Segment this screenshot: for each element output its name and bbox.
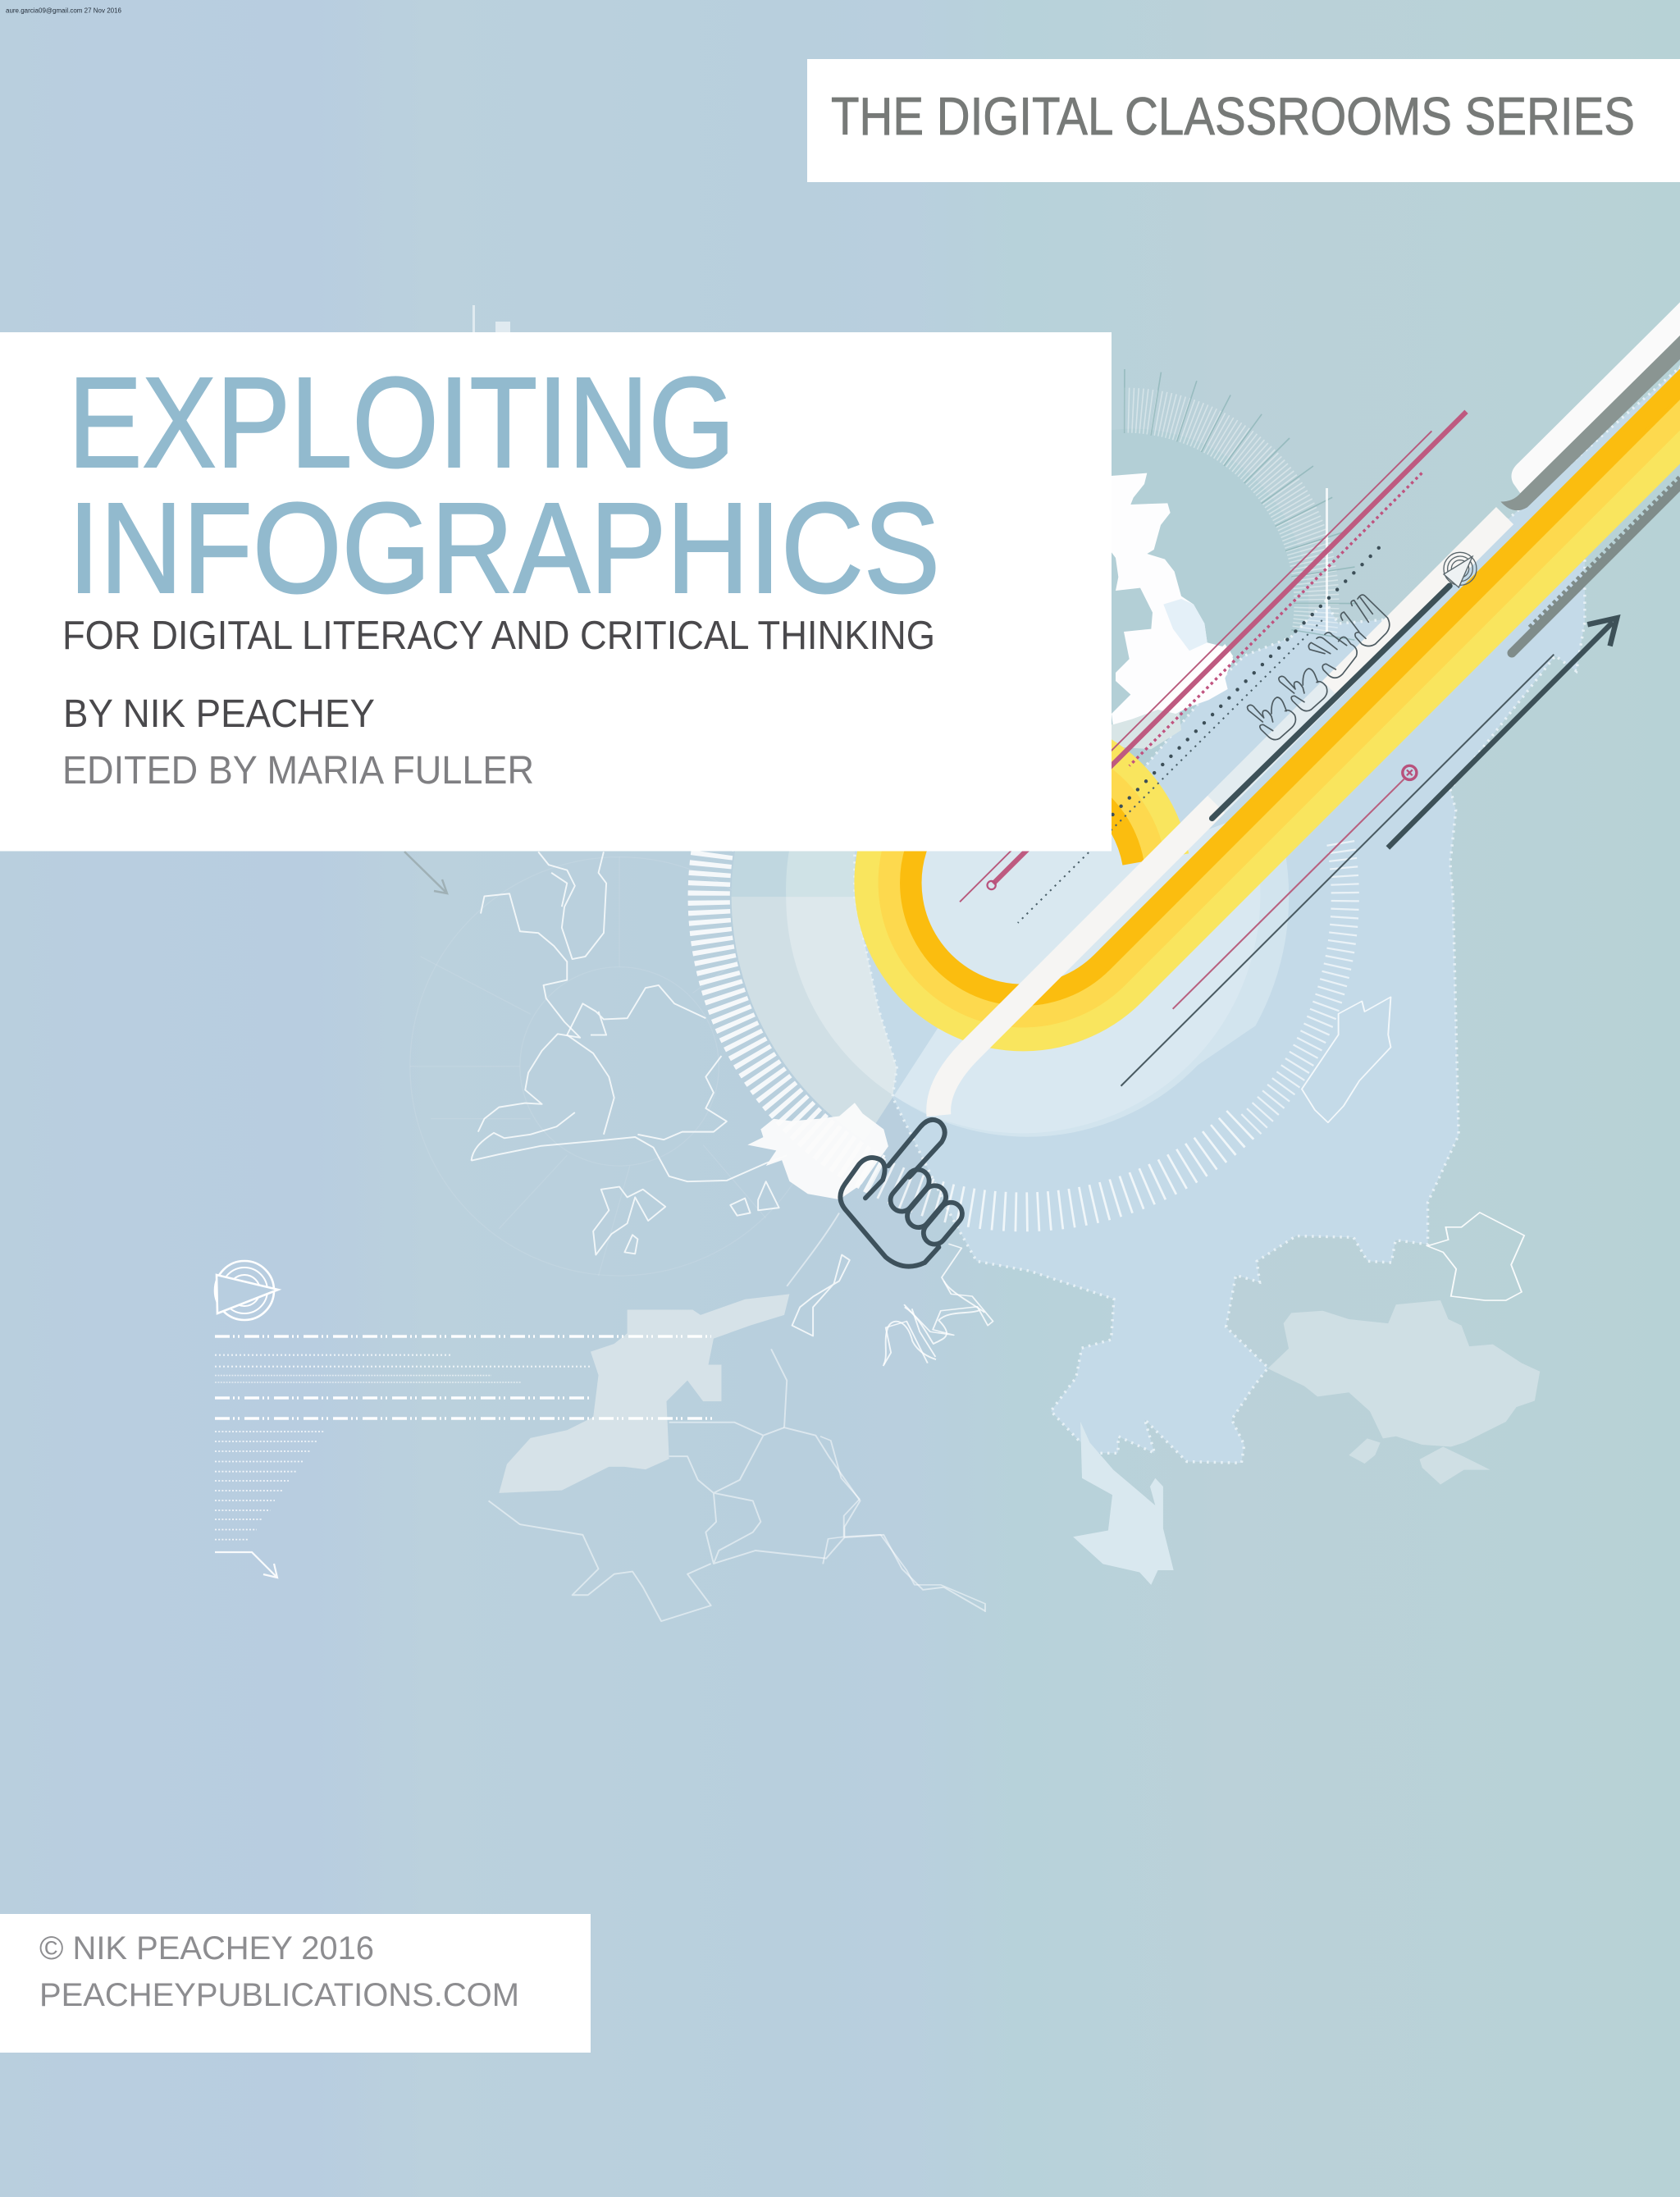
map: pale peninsula (1073, 1422, 1174, 1585)
grey upper stripe (1500, 265, 1680, 510)
radial tick arc: upper right (1124, 401, 1326, 645)
author: BY NIK PEACHEY (63, 692, 375, 736)
map: Ukraine (1267, 1300, 1540, 1447)
fragments above title panel (472, 305, 510, 333)
pink thin line (960, 431, 1431, 902)
radial tick ring around the hub (709, 815, 1345, 1212)
panel: title (0, 332, 1112, 852)
pink thin lower line (1173, 779, 1404, 1009)
map: Crimea (1349, 1438, 1491, 1484)
band: orange (911, 313, 1680, 995)
map: concentric discs and large blue region (732, 368, 1680, 1463)
white upper cap stripe (1511, 231, 1680, 493)
data lines: left dashed list (215, 1336, 713, 1540)
thin dark line (1121, 655, 1554, 1086)
pink dotted line (1130, 473, 1422, 765)
diagonal lines (960, 409, 1680, 1086)
panel: copyright (0, 1914, 591, 2053)
vertical white line (1326, 488, 1328, 632)
yellow ring and diagonal band (866, 313, 1680, 1039)
title line 1: EXPLOITING (68, 351, 735, 495)
small hand 2 (1279, 669, 1327, 711)
small hand 3 (1308, 633, 1357, 678)
icon: gray arrow under title panel (404, 852, 447, 893)
icon: large pointing hand (840, 1120, 967, 1267)
icon: compass on stripe (1444, 552, 1477, 587)
arrow: left list (215, 1552, 277, 1578)
small dotted line (1018, 620, 1322, 923)
map: France outline (1427, 1213, 1524, 1300)
small hand 1 (1248, 697, 1295, 740)
dark dotted line (1073, 548, 1379, 855)
map: United Kingdom (1112, 473, 1233, 749)
map: small outlines (820, 997, 1390, 1612)
map: western polar outlines (410, 852, 984, 1621)
band: outer yellow (866, 375, 1680, 1039)
panel: series label (807, 59, 1680, 182)
website line: PEACHEYPUBLICATIONS.COM (39, 1977, 519, 2013)
white diagonal stripe (938, 516, 1504, 1116)
dark arrow (1388, 618, 1617, 847)
pink target circle (1403, 765, 1417, 779)
map: pale filled country (499, 1294, 789, 1493)
title line 2: INFOGRAPHICS (68, 477, 940, 620)
small hand 4 (1341, 595, 1390, 646)
icon: row of small hands (1248, 595, 1390, 740)
map: Iceland (747, 1103, 888, 1199)
ruler strip (1512, 409, 1680, 653)
copyright line: © NIK PEACHEY 2016 (39, 1930, 374, 1966)
stripe pale mottled segment (1217, 689, 1331, 804)
editor: EDITED BY MARIA FULLER (62, 749, 534, 792)
re-cover band over stripe joint (1094, 304, 1680, 970)
dark line on stripe (1212, 586, 1449, 819)
map: eastern countries (820, 997, 1540, 1612)
band: mid yellow (890, 342, 1680, 1016)
pink small circle (988, 881, 996, 889)
watermark text: aure.garcia09@gmail.com 27 Nov 2016 (6, 7, 122, 15)
pink thick line (993, 412, 1467, 884)
icon: left compass (215, 1261, 278, 1320)
subtitle: FOR DIGITAL LITERACY AND CRITICAL THINKING (62, 614, 935, 658)
